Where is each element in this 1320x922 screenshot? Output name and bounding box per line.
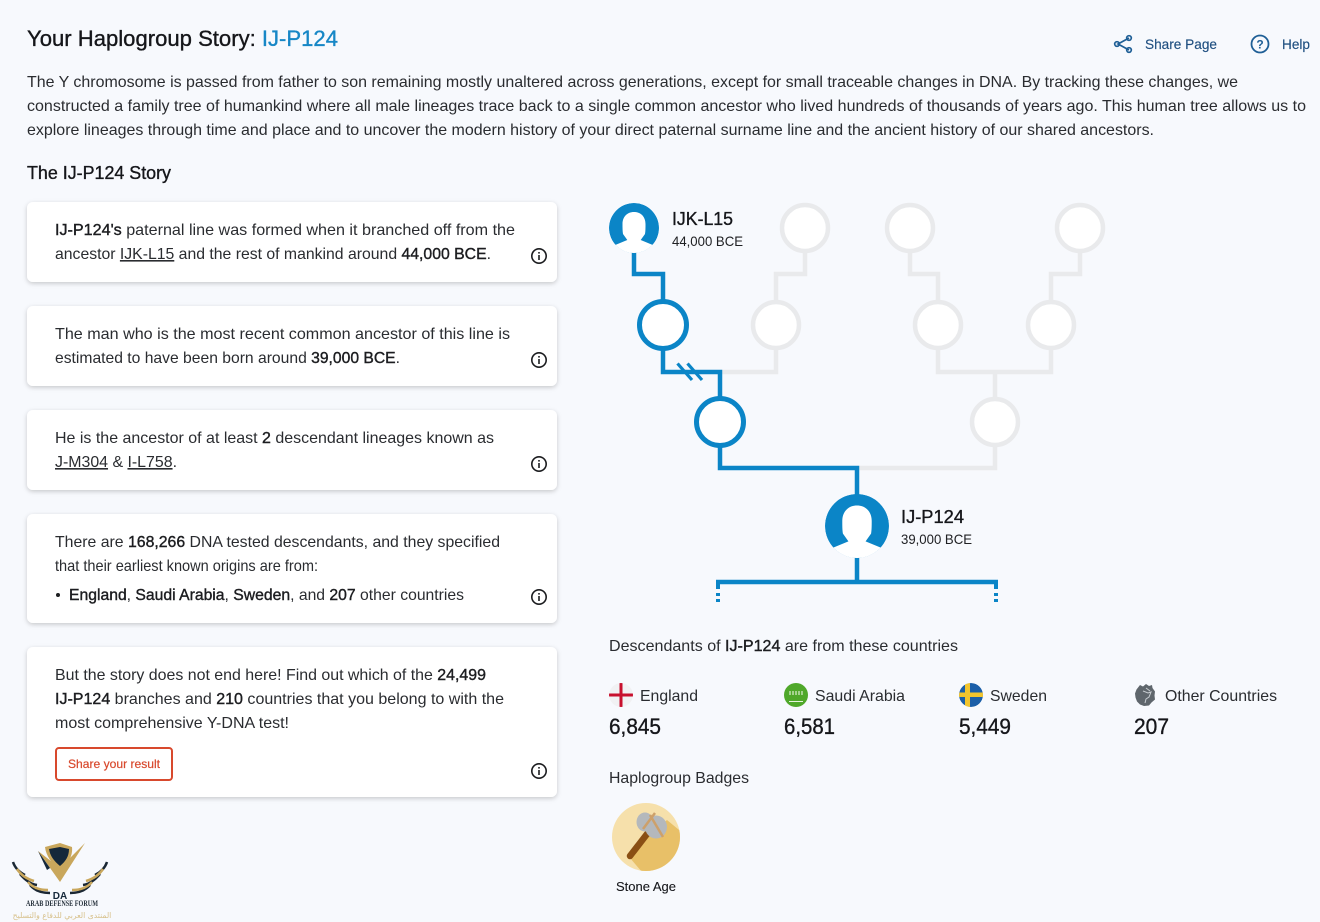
panel: story card 2 (27, 306, 557, 386)
icon: share (1115, 36, 1131, 52)
icon: globe (1135, 684, 1155, 706)
title: Your Haplogroup Story: IJ-P124 (27, 26, 338, 51)
icon: flag of Sweden (959, 683, 983, 707)
panel: story card 4: England, Saudi Arabia, Sweden, and 207 other countries (69, 587, 464, 604)
share page action (1115, 36, 1217, 52)
icon: help: ? (1256, 38, 1264, 52)
country stat: other countries (1134, 684, 1277, 739)
intro paragraph: explore lineages through time and place and to uncover the modern history of your direct paternal surname line and the ancient history of our shared ancestors. (27, 122, 1154, 139)
icon: descendant avatar (825, 494, 889, 558)
ancestor label (672, 209, 743, 249)
descendant label: IJ-P124 (901, 507, 964, 527)
panel: story card 1: ancestor IJK-L15 and the rest of mankind around 44,000 BCE. (55, 246, 491, 263)
countries heading: Descendants of IJ-P124 are from these countries (609, 638, 958, 655)
panel: story card 3: J-M304 & I-L758. (55, 454, 177, 471)
family tree diagram (608, 203, 1103, 602)
country stat: Sweden: 5,449 (959, 714, 1011, 739)
panel: story card 2: The man who is the most recent common ancestor of this line is (55, 326, 510, 343)
intro paragraph: The Y chromosome is passed from father to son remaining mostly unaltered across generations, except for small traceable changes in DNA. By tracking these changes, we (27, 74, 1238, 91)
badges heading: Haplogroup Badges (609, 770, 749, 787)
panel: story card 1 (27, 202, 557, 282)
descendant label (901, 507, 972, 547)
help action: Help (1282, 36, 1310, 52)
icon: info (532, 764, 546, 778)
ancestor label: 44,000 BCE (672, 233, 743, 249)
icon: info (532, 457, 546, 471)
intro paragraph: constructed a family tree of humankind where all male lineages trace back to a single common ancestor who lived hundreds of thousands of years ago. This human tree allows us to (27, 98, 1306, 115)
country stat: England: 6,845 (609, 714, 661, 739)
ancestor label: IJK-L15 (672, 209, 733, 229)
country stat: other countries: 207 (1134, 714, 1169, 739)
panel: story card 3 (27, 410, 557, 490)
grey inactive branches (720, 205, 1103, 468)
icon: info (532, 353, 546, 367)
country stat: Saudi Arabia: Saudi Arabia (815, 688, 905, 705)
share page action: Share Page (1145, 36, 1217, 52)
panel: story card 4: There are 168,266 DNA tested descendants, and they specified (55, 534, 500, 551)
icon: flag of England (609, 683, 633, 707)
icon: info (532, 249, 546, 263)
watermark logo: Arab Defense Forum: المنتدى العربي للدفاع والتسليح (13, 911, 111, 920)
country stat: Saudi Arabia (784, 683, 905, 739)
logo emblem: DA (53, 891, 67, 902)
icon: flag of Saudi Arabia (784, 683, 808, 707)
icon: ancestor avatar (609, 203, 659, 253)
panel: story card 5: But the story does not end here! Find out which of the 24,499 (55, 667, 486, 684)
country stat: England: England (640, 688, 698, 705)
break mark on line (678, 364, 702, 380)
panel: story card 1: IJ-P124's paternal line was formed when it branched off from the (55, 222, 515, 239)
country stat: Saudi Arabia: 6,581 (784, 714, 835, 739)
panel: story card 5: most comprehensive Y-DNA test! (55, 715, 289, 732)
panel: story card 5 (27, 647, 557, 797)
watermark logo: Arab Defense Forum (13, 843, 111, 920)
badge: stone age: Stone Age (616, 879, 676, 894)
button: share your result: Share your result (68, 757, 161, 771)
descendant label: 39,000 BCE (901, 531, 972, 547)
country stat: Sweden (959, 683, 1047, 739)
blue paternal line (634, 250, 998, 602)
watermark logo: Arab Defense Forum: ARAB DEFENSE FORUM (26, 899, 98, 908)
panel: story card 3: He is the ancestor of at least 2 descendant lineages known as (55, 430, 494, 447)
country stat: England (609, 683, 698, 739)
icon: info (532, 590, 546, 604)
panel: story card 2: estimated to have been born around 39,000 BCE. (55, 350, 400, 367)
button: share your result (56, 748, 172, 780)
panel: story card 5: IJ-P124 branches and 210 countries that you belong to with the (55, 691, 504, 708)
badge: stone age (612, 803, 684, 894)
country stat: other countries: Other Countries (1165, 688, 1277, 705)
country stat: Sweden: Sweden (990, 688, 1047, 705)
section heading: The IJ-P124 Story (27, 163, 171, 183)
intro paragraph (27, 74, 1306, 139)
icon: stone axe (612, 803, 680, 871)
panel: story card 4 (27, 514, 557, 623)
help action (1252, 36, 1310, 52)
panel: story card 4: that their earliest known origins are from: (55, 558, 318, 575)
